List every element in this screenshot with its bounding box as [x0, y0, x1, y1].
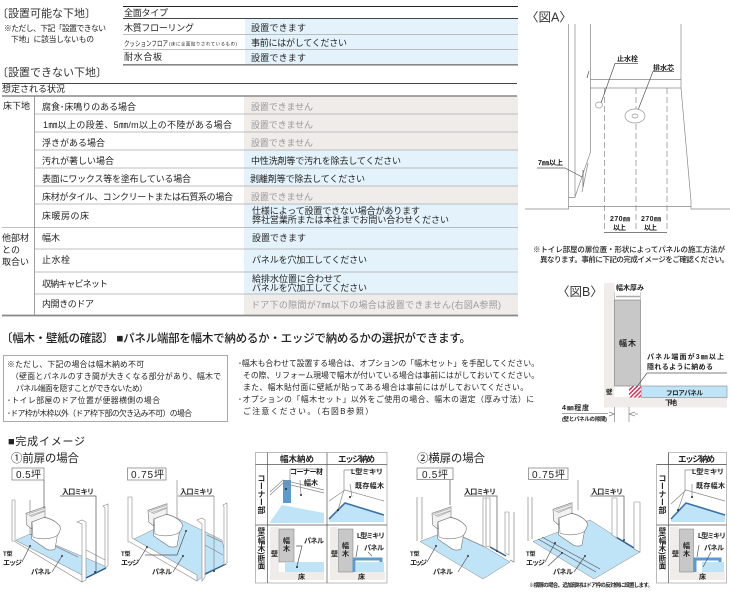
comparison table: baseboard vs edge (front door)	[256, 452, 387, 583]
table: full-surface type: 設置できます	[251, 53, 306, 63]
table: assumed situations: 設置できません	[251, 192, 313, 202]
table: assumed situations: 汚れが著しい場合	[42, 155, 114, 166]
section: edge finish: 木	[683, 549, 690, 558]
comparison table: baseboard vs edge (front door): 幅木納め	[280, 454, 314, 464]
corner: edge finish: 既存幅木	[696, 481, 725, 490]
table: assumed situations: 幅木	[42, 232, 60, 243]
section: baseboard finish	[270, 527, 324, 581]
section: baseboard finish: 幅	[283, 536, 290, 545]
table: assumed situations: 他部材	[2, 232, 29, 243]
note: figure A caution: ※トイレ部屋の扉位置・形状によってパネルの施工方法が	[533, 244, 726, 254]
section: baseboard finish: 壁	[271, 549, 278, 558]
corner: edge finish: L型ミキリ	[692, 467, 724, 476]
illustration: sliding door 0.75 tsubo: T型	[526, 550, 536, 558]
section: edge finish: L型ミキリ	[698, 531, 726, 540]
table: assumed situations: 設置できません	[251, 102, 313, 112]
label: corner row: コーナー部	[658, 474, 667, 515]
section: edge finish: L型ミキリ	[357, 531, 385, 540]
corner: edge finish: L型ミキリ	[351, 467, 383, 476]
table: assumed situations: 設置できません	[251, 138, 313, 148]
note box: baseboard not allowed: ※ただし、下記の場合は幅木納め不可	[7, 359, 144, 369]
table: assumed situations: パネルを穴加工してください	[252, 283, 367, 293]
heading: baseboard and wallpaper check: 〔幅木・壁紙の確認〕 ■パネル端部を幅木で納めるか・エッジで納めるかの選択ができます。	[1, 331, 471, 345]
table: assumed situations: 弊社営業所または本社までお問い合わせください	[252, 214, 449, 225]
hatched overlap	[629, 386, 641, 398]
text block: baseboard set options: ･幅木も合わせて設置する場合は、オプションの「幅木セット」を手配してください。	[238, 358, 539, 368]
label: 7mm clearance: 7㎜以上	[538, 158, 563, 167]
dimension: 270 left	[610, 216, 630, 232]
comparison table: edge finish (sliding door): エッジ納め	[678, 454, 715, 464]
table: full-surface type: 耐水合板	[124, 51, 162, 62]
section: edge finish: 壁	[672, 549, 679, 558]
table: assumed situations: 1㎜以上の段差、5㎜/m以上の不陸がある場合	[43, 119, 232, 130]
table: assumed situations: 床材がタイル、コンクリートまたは石質系の場合	[42, 191, 233, 202]
corner: baseboard finish: 幅木	[304, 478, 318, 487]
label: drain core: 排水芯	[653, 63, 674, 72]
table: assumed situations: 中性洗剤等で汚れを除去してください	[251, 155, 401, 166]
floor panel	[641, 386, 727, 398]
table: assumed situations: 設置できます	[252, 233, 306, 243]
dimension: 270 right	[641, 216, 661, 232]
section: baseboard finish: 木	[283, 544, 290, 553]
table: assumed situations: 床下地	[3, 100, 30, 111]
section: edge finish: 幅	[342, 541, 349, 550]
text block: baseboard set options: ･オプションの「幅木セット」以外をご使用の場合、幅木の選定（厚み寸法）に	[238, 394, 534, 404]
note: figure A caution: 異なります。事前に下記の完成イメージをご確認ください。	[540, 254, 729, 264]
table: full-surface type: 設置できます	[251, 23, 306, 33]
table: assumed situations	[2, 83, 518, 316]
illustration: sliding door 0.5 tsubo: エッジ	[410, 559, 427, 567]
table: assumed situations: 取合い	[2, 256, 29, 267]
dimension: 270 left: 270㎜	[610, 216, 630, 223]
table: full-surface type: 木質フローリング	[124, 22, 194, 33]
illustration: sliding door 0.5 tsubo: T型	[410, 550, 420, 558]
note: installable subfloor condition: ※ただし、下記「設置できない	[4, 24, 106, 33]
illustration: sliding door 0.75 tsubo: パネル	[553, 568, 573, 576]
section: edge finish: パネル	[704, 544, 724, 552]
note: 4mm gap: 4㎜程度	[562, 403, 589, 412]
table: full-surface type: 事前にはがしてください	[251, 37, 347, 48]
table: assumed situations: 収納キャビネット	[42, 278, 108, 289]
table: full-surface type: (床に全面貼りされているもの)	[169, 40, 238, 48]
table: full-surface type	[123, 6, 518, 65]
section: baseboard finish: パネル	[304, 537, 324, 545]
note: sliding door edge placement: ※横扉の場合、追加部材はドア枠の反対側に設置します。	[529, 581, 653, 589]
text block: baseboard set options: ご注意ください。（右図B参照）	[243, 406, 373, 416]
section: edge finish: 床	[358, 573, 365, 581]
note: figure A caution	[533, 244, 729, 264]
heading: figure A: 〈図A〉	[526, 10, 572, 24]
callout: hide panel edge 3mm: パネル端面が3㎜以上	[647, 352, 724, 361]
dimension: 270 right: 以上	[644, 223, 657, 232]
dimension: 270 left: 以上	[613, 223, 626, 232]
label: water stop valve: 止水栓	[617, 54, 638, 63]
label: section row: 壁(幅木)断面	[257, 526, 266, 571]
note box: baseboard not allowed: ･トイレ部屋のドア位置が便器横側の場合	[7, 395, 160, 405]
illustration: front door 0.5 tsubo	[3, 468, 108, 582]
table: assumed situations: 設置できません	[251, 120, 313, 130]
illustration: sliding door 0.5 tsubo: 入口ミキリ	[464, 488, 496, 496]
label: corner row: コーナー部	[257, 474, 266, 515]
section: baseboard finish: 床	[298, 573, 305, 581]
label: 7mm clearance	[537, 158, 583, 187]
table: assumed situations: 腐食･床鳴りのある場合	[42, 101, 136, 112]
table: assumed situations: 浮きがある場合	[42, 137, 105, 148]
table: assumed situations: 床暖房の床	[42, 210, 89, 221]
figure B: baseboard section: 幅木厚み	[616, 283, 644, 292]
note: installable subfloor condition: 下地」に該当しないもの	[11, 34, 94, 44]
comparison table: baseboard vs edge (front door): エッジ納め	[338, 454, 375, 464]
note box: baseboard not allowed	[4, 356, 228, 422]
illustration: front door 0.5 tsubo: パネル	[31, 568, 51, 576]
table: assumed situations: 想定される状況	[2, 83, 65, 94]
text block: baseboard set options	[238, 358, 539, 416]
baseboard: 幅木	[619, 338, 636, 348]
label: 0.5: 0.5坪	[422, 468, 448, 481]
corner: edge finish: 既存幅木	[355, 481, 384, 490]
table: full-surface type: 全面タイプ	[124, 7, 168, 18]
callout: hide panel edge 3mm: 隠れるように納める	[647, 362, 713, 371]
label: 0.5: 0.5坪	[16, 468, 41, 481]
label: drain core	[625, 63, 674, 123]
illustration: front door 0.75 tsubo: T型	[121, 550, 131, 558]
table: assumed situations: 止水栓	[42, 254, 70, 265]
illustration: sliding door 0.75 tsubo	[526, 468, 640, 579]
table: assumed situations: パネルを穴加工してください	[252, 255, 367, 265]
corner: edge finish	[671, 467, 725, 522]
heading: figure B: 〈図B〉	[557, 285, 603, 299]
callout: hide panel edge 3mm	[647, 352, 724, 371]
label: water stop valve	[596, 54, 638, 108]
section: edge finish	[670, 527, 726, 581]
illustration: front door 0.75 tsubo: エッジ	[121, 559, 139, 567]
table: assumed situations: 剥離剤等で除去してください	[250, 173, 365, 184]
table: assumed situations: 仕様によって設置できない場合があります	[252, 205, 420, 216]
table: assumed situations: との	[2, 245, 20, 255]
label: 0.75: 0.75坪	[131, 468, 164, 481]
section: edge finish: 壁	[331, 549, 338, 558]
text block: baseboard set options: その際、リフォーム現場で幅木が付いている場合は事前にはがしておいてください。	[243, 370, 539, 380]
illustration: sliding door 0.75 tsubo: 入口ミキリ	[591, 488, 623, 496]
corner: baseboard finish	[270, 467, 324, 523]
floor panel: フロアパネル	[666, 389, 704, 397]
section: edge finish: パネル	[364, 544, 384, 552]
illustration: front door 0.75 tsubo	[121, 468, 227, 581]
corner: baseboard finish: コーナー材	[290, 467, 323, 476]
illustration: front door 0.75 tsubo: 入口ミキリ	[180, 488, 213, 496]
figure A: room plan with clearances	[525, 10, 730, 232]
section: edge finish	[330, 527, 385, 581]
label: section row: 壁(幅木)断面	[658, 526, 667, 571]
note box: baseboard not allowed: ･ドア枠が木枠以外（ドア枠下部の欠き込み不可）の場合	[7, 408, 192, 418]
illustration: front door 0.75 tsubo: パネル	[152, 568, 172, 576]
illustration: sliding door 0.5 tsubo	[410, 468, 514, 579]
table: assumed situations: 内開きのドア	[42, 298, 94, 309]
text block: baseboard set options: また、幅木貼付面に壁紙が貼ってある場合は事前にはがしておいてください。	[243, 382, 528, 392]
corner: edge finish	[329, 467, 384, 522]
table: full-surface type: クッションフロア	[124, 39, 168, 48]
table: assumed situations: 給排水位置に合わせて	[252, 273, 342, 284]
section: edge finish: 幅	[683, 541, 690, 550]
label: 0.75: 0.75坪	[532, 468, 565, 481]
illustration: front door 0.5 tsubo: エッジ	[3, 559, 22, 567]
table: assumed situations: 表面にワックス等を塗布している場合	[42, 173, 191, 184]
illustration: front door 0.5 tsubo: T型	[3, 550, 13, 558]
figure B: baseboard section	[557, 283, 727, 423]
illustration: front door 0.5 tsubo: 入口ミキリ	[62, 488, 94, 496]
illustration: sliding door 0.5 tsubo: パネル	[433, 568, 453, 576]
comparison table: edge finish (sliding door)	[656, 452, 726, 583]
heading: front door case: ①前扉の場合	[11, 451, 80, 465]
section: edge finish: 床	[699, 573, 706, 581]
illustration: sliding door 0.75 tsubo: エッジ	[526, 559, 545, 567]
note: installable subfloor condition	[4, 24, 106, 44]
baseboard	[614, 300, 640, 386]
heading: completed image: ■完成イメージ	[8, 435, 85, 448]
heading: sliding door case: ②横扉の場合	[417, 451, 486, 465]
dimension: 270 right: 270㎜	[641, 216, 661, 223]
note box: baseboard not allowed: パネル端面を隠すことができないため）	[16, 383, 147, 393]
section: edge finish: 木	[342, 549, 349, 558]
table: assumed situations: ドア下の隙間が7㎜以下の場合は設置できません(右図A参照)	[251, 299, 501, 310]
note: 4mm gap: (壁とパネルの隙間)	[562, 415, 607, 423]
figure B: baseboard section: 下地	[665, 398, 677, 407]
note: 4mm gap	[562, 403, 638, 423]
note box: baseboard not allowed: （壁面とパネルのすき間が大きくなる部分があり、幅木で	[11, 371, 221, 381]
heading: non-installable subfloors: 〔設置できない下地〕	[0, 66, 107, 79]
figure B: baseboard section: 壁	[606, 387, 613, 396]
